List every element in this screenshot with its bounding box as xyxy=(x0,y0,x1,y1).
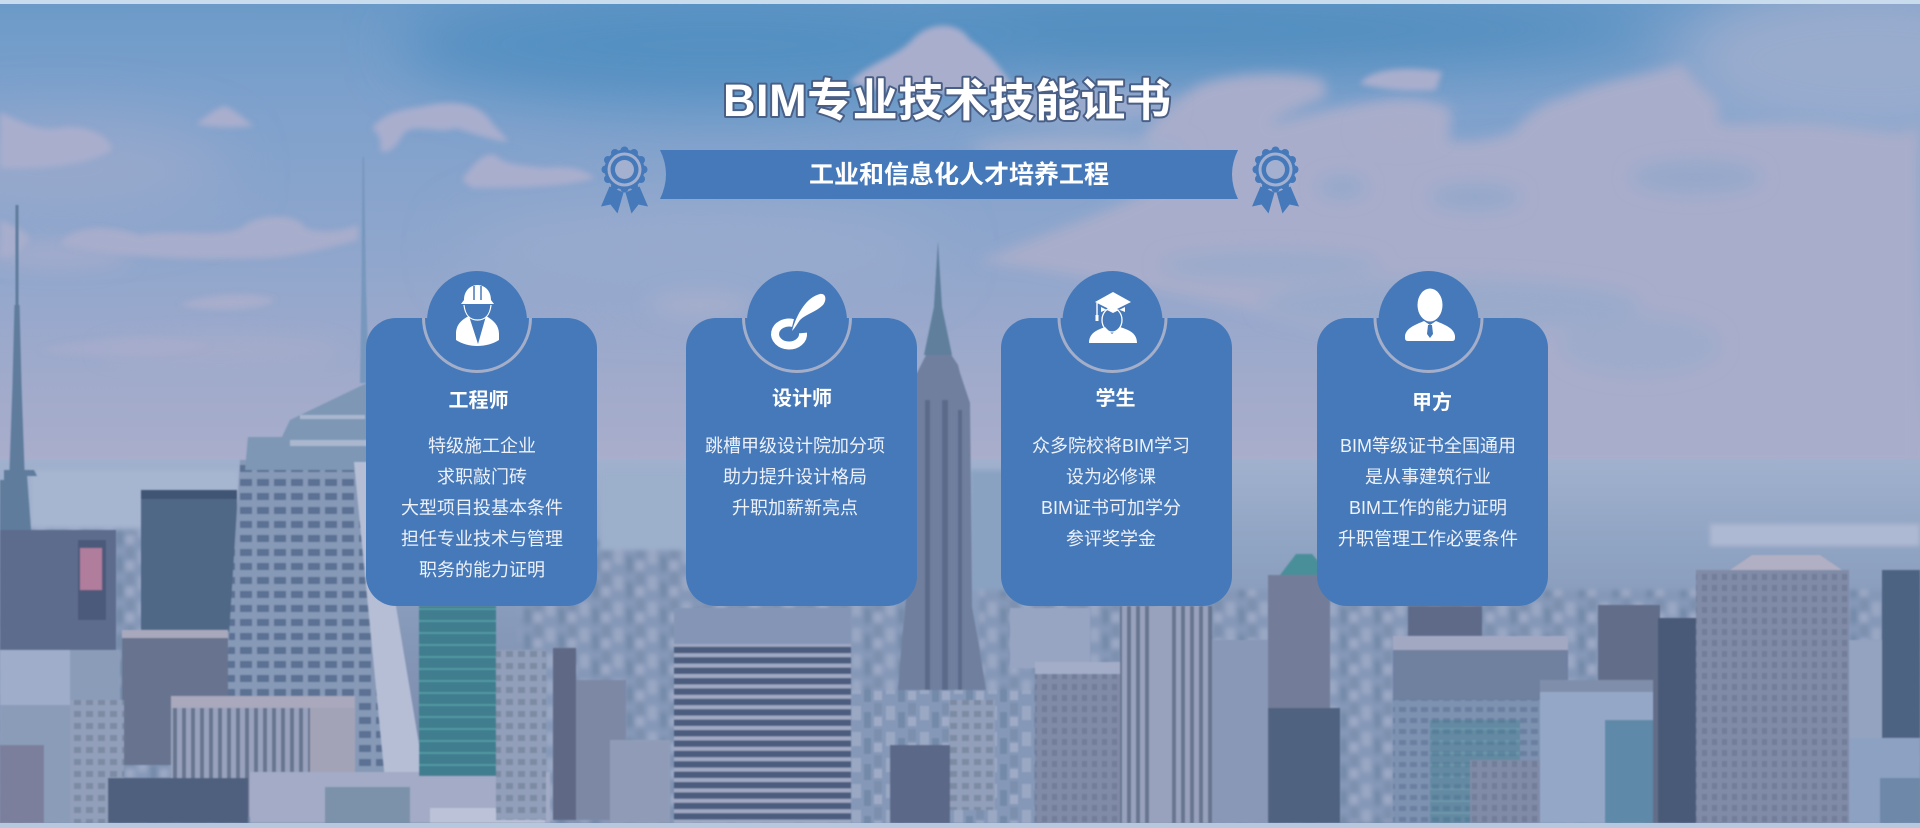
heading: student: 学生 xyxy=(1096,387,1136,410)
text: student benefits: 设为必修课 xyxy=(1066,467,1156,487)
heading: engineer: 工程师 xyxy=(448,389,508,412)
left antenna tower xyxy=(0,205,37,530)
text: engineer benefits: 求职敲门砖 xyxy=(437,467,527,487)
text: designer benefits xyxy=(705,436,885,518)
text: client benefits: 升职管理工作必要条件 xyxy=(1338,529,1518,549)
text: student benefits xyxy=(1032,436,1190,549)
text: engineer benefits: 特级施工企业 xyxy=(428,436,536,456)
cloud mass right side xyxy=(980,63,1920,470)
icon: right medal xyxy=(1252,146,1299,214)
ribbon banner with subtitle xyxy=(660,150,1238,199)
central windowed building xyxy=(674,608,851,644)
text: student benefits: BIM证书可加学分 xyxy=(1041,498,1181,518)
text: client benefits: 是从事建筑行业 xyxy=(1365,467,1491,487)
panel: student xyxy=(1001,271,1232,606)
title: BIM专业技术技能证书 xyxy=(723,75,1171,126)
text: engineer benefits: 大型项目投基本条件 xyxy=(401,498,563,518)
text: engineer benefits xyxy=(401,436,563,580)
glass tower xyxy=(360,157,369,383)
empire state tower xyxy=(898,242,986,690)
text: client benefits: BIM等级证书全国通用 xyxy=(1340,436,1516,456)
icon: designer brush and ring xyxy=(775,294,825,346)
teal tower xyxy=(419,606,496,776)
text: engineer benefits: 担任专业技术与管理 xyxy=(401,529,563,549)
icon: left medal xyxy=(601,146,648,214)
ribbon banner with subtitle: 工业和信息化人才培养工程 xyxy=(809,161,1109,189)
right towers xyxy=(1598,605,1660,823)
panel: client xyxy=(1317,271,1548,606)
text: designer benefits: 助力提升设计格局 xyxy=(723,467,867,487)
center right towers xyxy=(1010,608,1090,668)
heading: client: 甲方 xyxy=(1412,390,1452,414)
background: sky with clouds xyxy=(0,0,1920,470)
text: student benefits: 众多院校将BIM学习 xyxy=(1032,436,1190,456)
text: engineer benefits: 职务的能力证明 xyxy=(419,560,545,580)
text: student benefits: 参评奖学金 xyxy=(1066,529,1156,549)
icon: engineer with hard hat xyxy=(456,285,499,346)
heading: designer: 设计师 xyxy=(772,387,832,410)
text: client benefits xyxy=(1338,436,1518,549)
icon: businessman xyxy=(1405,288,1455,341)
text: designer benefits: 跳槽甲级设计院加分项 xyxy=(705,436,885,456)
text: client benefits: BIM工作的能力证明 xyxy=(1349,498,1507,518)
panel: engineer xyxy=(366,271,597,606)
text: designer benefits: 升职加薪新亮点 xyxy=(732,498,858,518)
icon: student with graduation cap xyxy=(1089,292,1137,343)
panel: designer xyxy=(686,271,917,606)
